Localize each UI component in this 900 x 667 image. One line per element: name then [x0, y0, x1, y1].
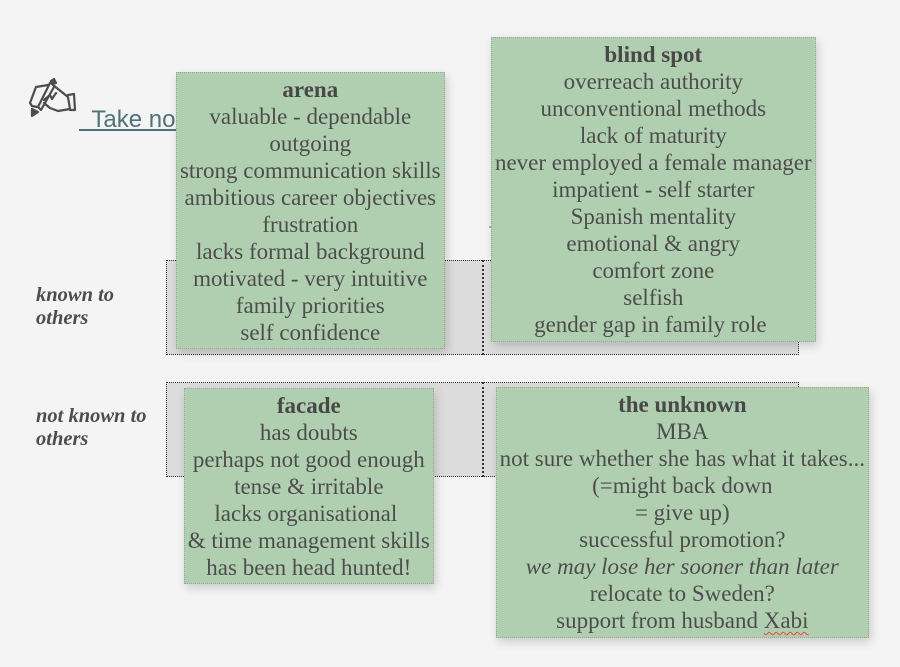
- panel: arena: family priorities: [236, 293, 385, 318]
- panel: facade: [184, 388, 434, 584]
- row label: not known to others: others: [36, 428, 88, 450]
- grid cell: bottom right: [482, 382, 799, 477]
- panel: blind spot: comfort zone: [592, 258, 714, 283]
- panel: blind spot: overreach authority: [564, 69, 743, 94]
- panel: arena: [176, 72, 445, 349]
- panel: the unknown: (=might back down: [592, 473, 772, 498]
- panel: blind spot: Spanish mentality: [571, 204, 736, 229]
- panel: the unknown: relocate to Sweden?: [590, 581, 775, 606]
- panel: blind spot: impatient - self starter: [552, 177, 755, 202]
- grid cell: bottom left: [166, 382, 484, 477]
- panel: arena: frustration: [262, 212, 358, 237]
- panel: blind spot: emotional & angry: [566, 231, 740, 256]
- panel: arena: motivated - very intuitive: [193, 266, 428, 291]
- panel: blind spot: unconventional methods: [541, 96, 766, 121]
- panel: arena: lacks formal background: [196, 239, 425, 264]
- panel: facade: lacks organisational: [214, 501, 397, 526]
- row label: known to others: known to: [36, 284, 114, 306]
- panel: facade: facade: [277, 393, 341, 418]
- panel: arena: strong communication skills: [180, 158, 441, 183]
- panel: blind spot: [491, 37, 816, 342]
- panel: blind spot: never employed a female manager: [495, 150, 812, 175]
- row label: known to others: others: [36, 307, 88, 329]
- panel: arena: ambitious career objectives: [184, 185, 436, 210]
- panel: the unknown: not sure whether she has what it takes...: [500, 446, 865, 471]
- row label: not known to others: not known to: [36, 405, 147, 427]
- panel: the unknown: = give up): [635, 500, 730, 525]
- panel: the unknown: successful promotion?: [579, 527, 785, 552]
- panel: facade: & time management skills: [188, 528, 430, 553]
- panel: facade: perhaps not good enough: [193, 447, 425, 472]
- stray mark behind blind spot panel: [489, 226, 492, 228]
- grid cell: top left: [166, 260, 484, 355]
- panel: the unknown: [496, 387, 869, 638]
- panel: facade: has doubts: [260, 420, 358, 445]
- panel: the unknown: we may lose her sooner than later: [526, 554, 839, 579]
- panel: blind spot: gender gap in family role: [534, 312, 767, 337]
- panel: the unknown: the unknown: [618, 392, 747, 417]
- grid cell: top right: [482, 260, 799, 355]
- panel: the unknown: MBA: [656, 419, 708, 444]
- row label: known to others: [36, 284, 114, 329]
- panel: arena: arena: [282, 77, 338, 102]
- panel: blind spot: lack of maturity: [580, 123, 727, 148]
- panel: facade: has been head hunted!: [206, 555, 411, 580]
- panel: blind spot: blind spot: [604, 42, 702, 67]
- panel: facade: tense & irritable: [234, 474, 384, 499]
- panel: arena: valuable - dependable: [209, 104, 411, 129]
- panel: arena: outgoing: [269, 131, 351, 156]
- panel: arena: self confidence: [240, 320, 380, 345]
- icon: hand writing with pen: [28, 78, 76, 118]
- panel: the unknown: support from husband Xabi: [556, 608, 808, 633]
- row label: not known to others: [36, 405, 147, 450]
- panel: blind spot: selfish: [623, 285, 683, 310]
